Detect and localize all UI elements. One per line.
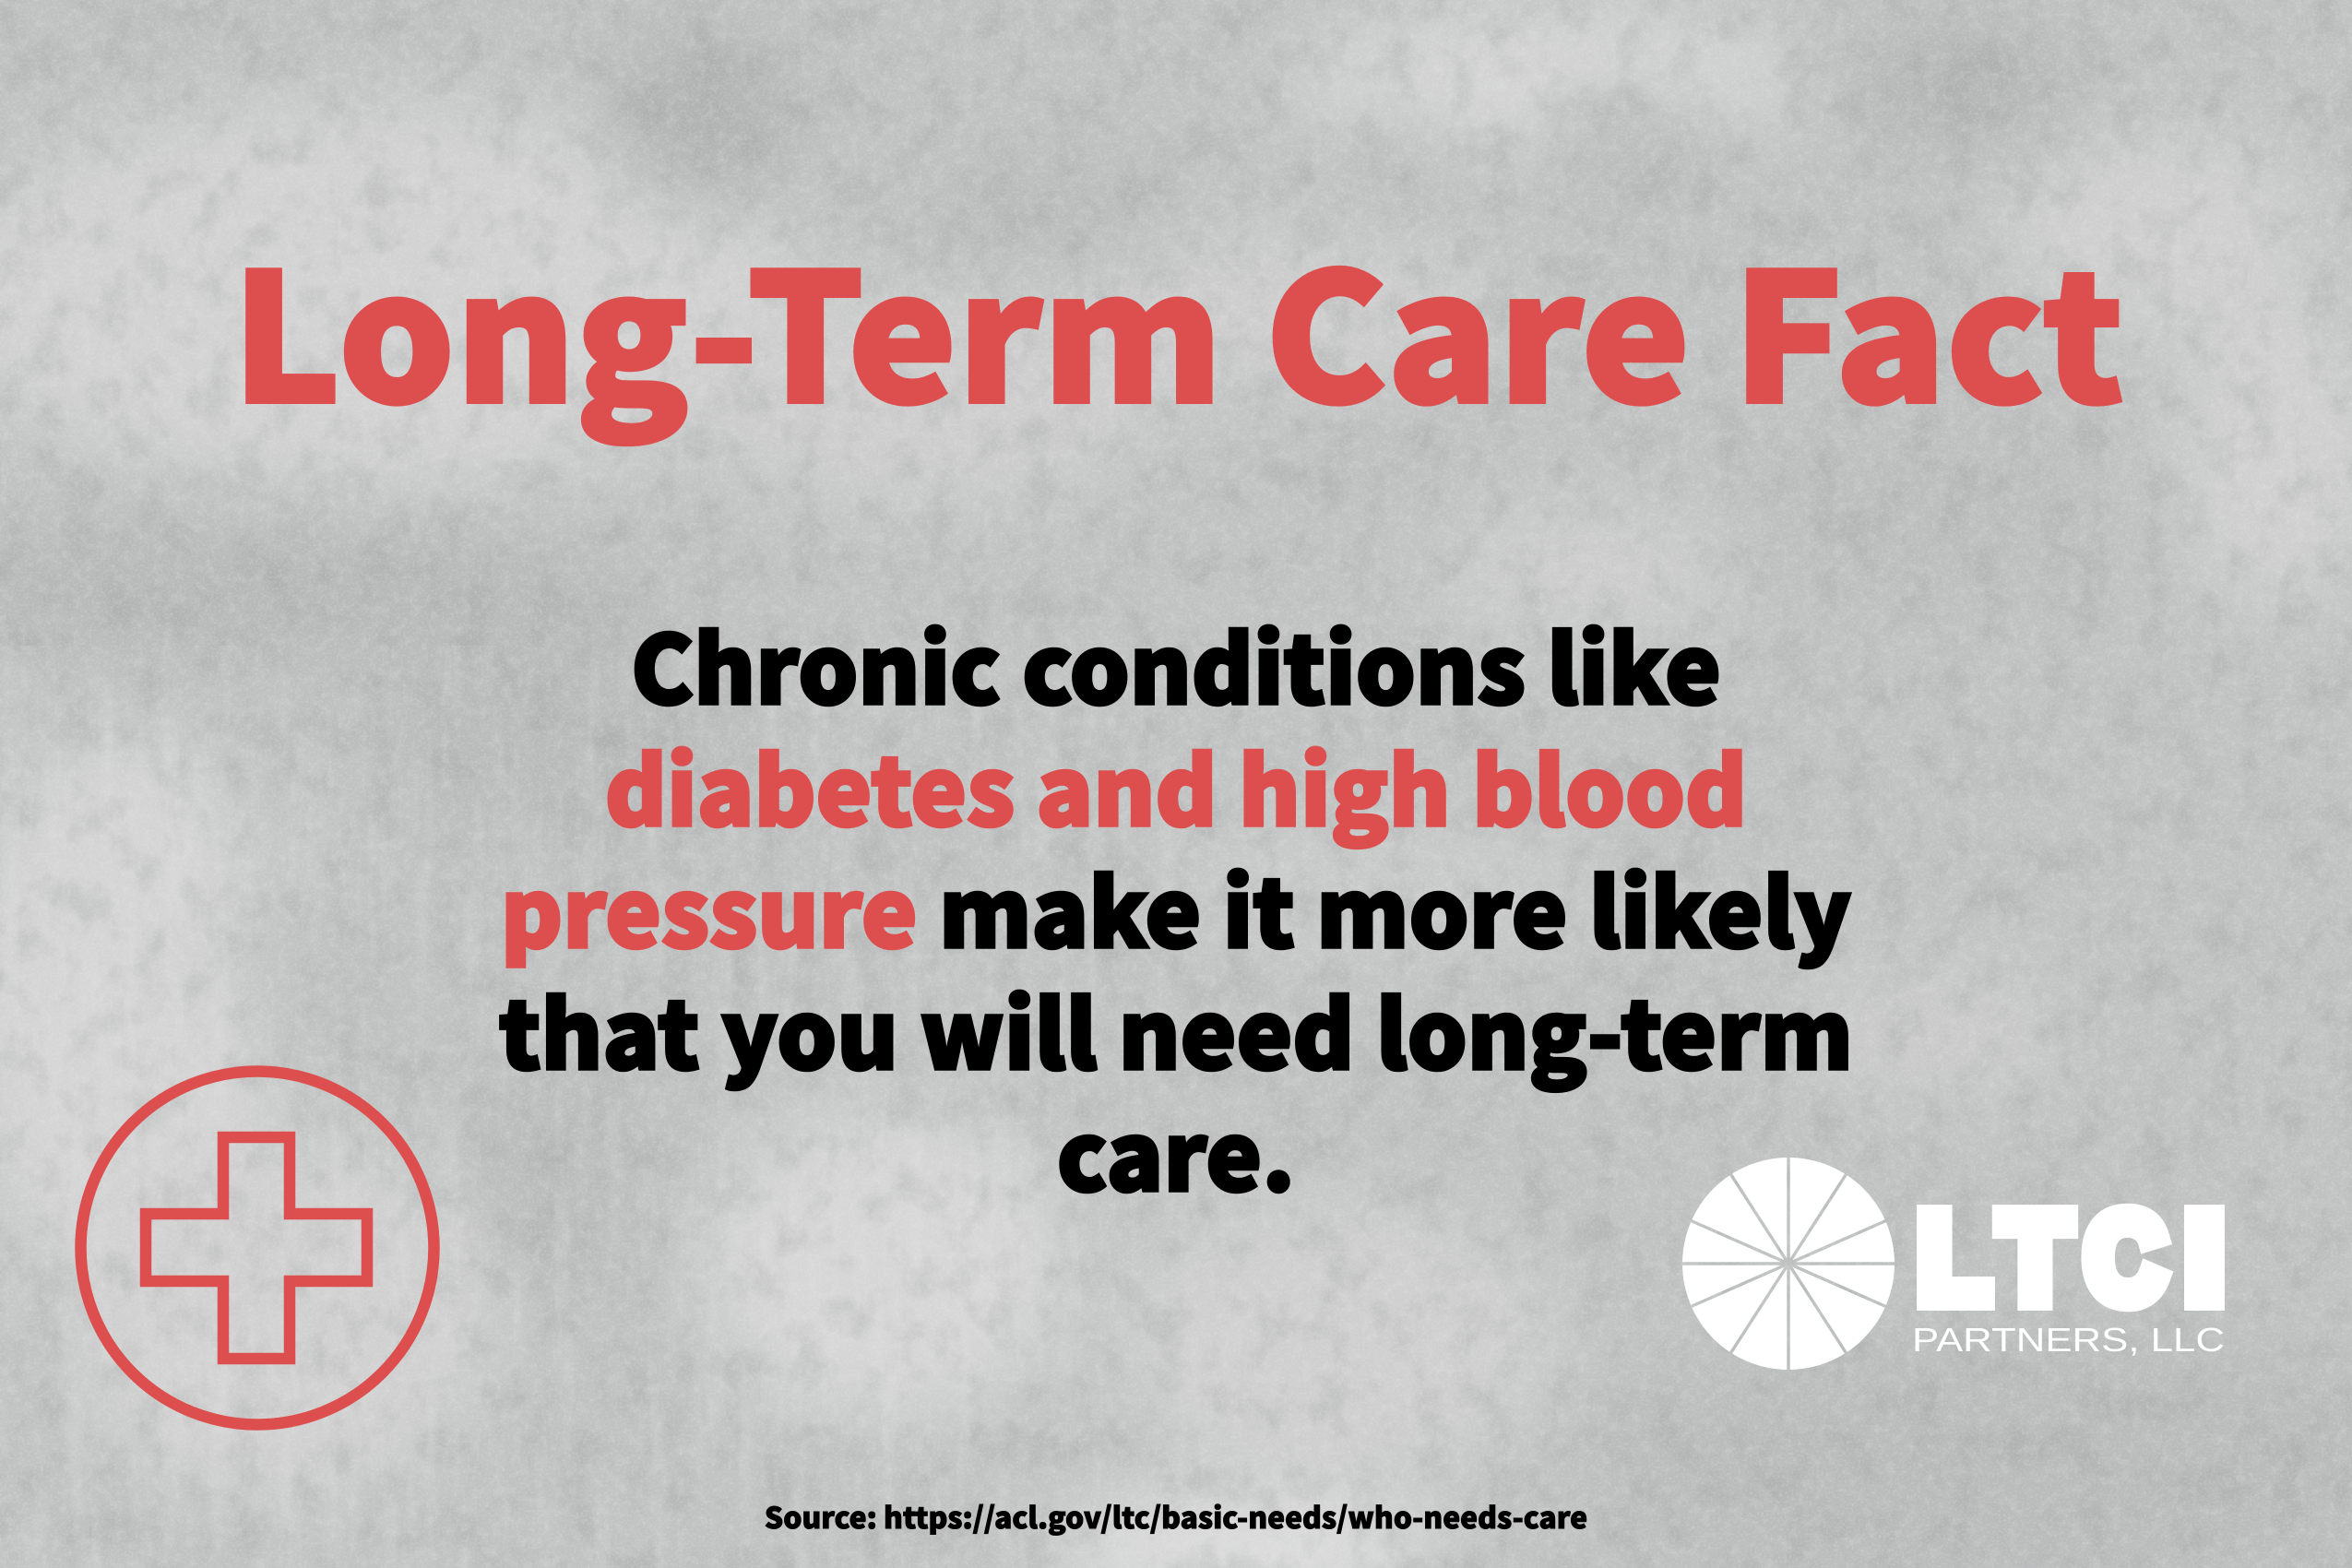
body line 5: care. [1057, 1083, 1295, 1218]
body text: chronic conditions statement [499, 596, 1853, 1218]
title: Long-Term Care Fact [232, 196, 2124, 454]
body line 2: highlighted: diabetes and high blood [605, 718, 1747, 853]
logo wordmark LTCI: L [1918, 1188, 1990, 1327]
source line: Source: https://acl.gov/ltc/basic-needs/who-needs-care [765, 1495, 1587, 1538]
logo tagline: PARTNERS, LLC [1912, 1321, 2225, 1359]
icon cross [146, 1137, 367, 1359]
logo wordmark LTCI: T [2000, 1189, 2070, 1327]
icon: medical cross in circle [81, 1072, 434, 1424]
body line 3: highlight and text: pressure make it more likely [501, 839, 1851, 975]
logo wheel [1682, 1158, 1895, 1370]
body line 4: that you will need long-term [499, 961, 1853, 1097]
icon ring [81, 1072, 434, 1424]
logo wordmark LTCI [1918, 1188, 2223, 1327]
logo wordmark LTCI: I [2186, 1189, 2223, 1327]
logo: LTCI Partners, LLC [1682, 1158, 2225, 1370]
body line 1: Chronic conditions like [631, 596, 1721, 731]
logo wordmark LTCI: C [2085, 1188, 2165, 1327]
